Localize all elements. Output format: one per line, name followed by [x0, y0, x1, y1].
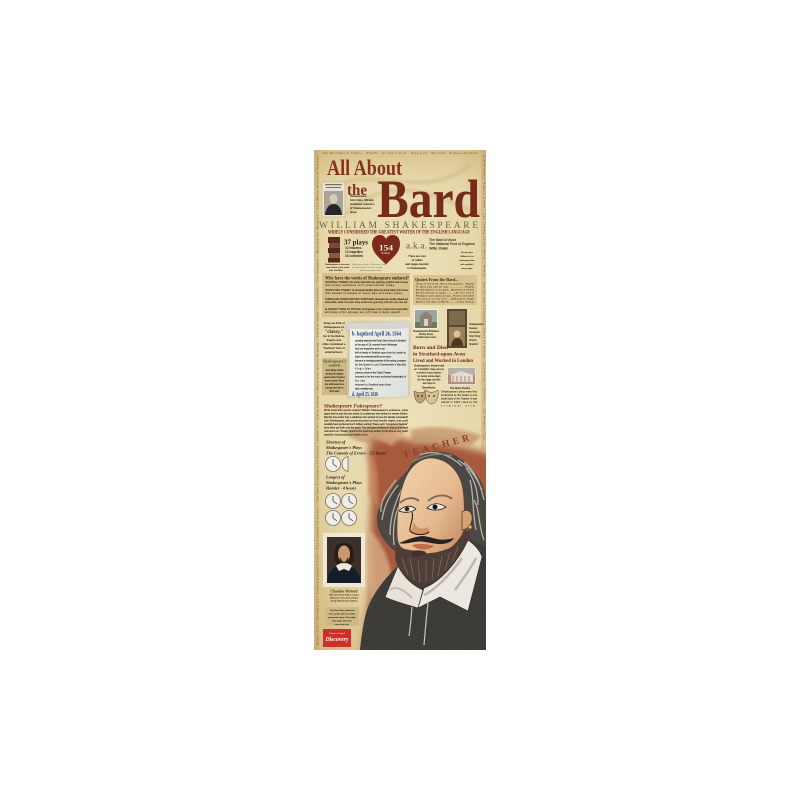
- quotes list: All that glisters is not gold....Merchant of Venice: [416, 288, 475, 292]
- birth date: b. baptized April 26, 1564: [352, 332, 401, 338]
- first folio image with caption: plays.: [350, 210, 358, 214]
- icon: heart with sonnet count: [372, 235, 400, 264]
- note: signature: contemporaries,: [459, 259, 475, 262]
- block body: referred to as "Shake" found in the surviving stories of the time is very much: [324, 430, 409, 433]
- green note: and the passing of time.: [360, 269, 382, 272]
- portrait face: [396, 458, 464, 554]
- text: longest play: Hamlet - 4 hours: [325, 486, 357, 490]
- caption: Globe Theatre: rebuilt in 1997 close to the: [441, 401, 478, 404]
- photo: portrait and grave: [447, 309, 467, 348]
- background paint splash behind portrait: [345, 424, 495, 660]
- panel: Chandos portrait: [323, 533, 365, 602]
- title: Bard: [377, 169, 480, 229]
- a.k.a. nicknames: a.k.a.: [406, 240, 427, 250]
- quotes list: To be, or not to be, that is the question...Hamlet: [416, 282, 474, 286]
- photo: birthplace cottage: Henley Street,: [419, 333, 434, 336]
- block body: have been put forth over the years. The strongest evidence is that an individual: [324, 426, 408, 430]
- icon: clocks, 2.5 hours: [326, 456, 348, 472]
- panel reasons: believable, while the plots keep audiences guessing until the very last act.: [325, 301, 408, 304]
- note: signature: William to his: [461, 255, 474, 258]
- note box: have been lost.: [335, 623, 350, 626]
- caption: Globe Theatre: performed at the Globe on the: [441, 394, 478, 397]
- block body: While historical records support William Shakespeare's existence, some: [324, 409, 409, 412]
- note: signature: many ways.: [461, 268, 473, 270]
- border text: list of plays: [316, 151, 486, 645]
- text: classy Shakespeare: [322, 321, 346, 354]
- quotes list: Parting is such sweet sorrow....Romeo and Juliet: [416, 294, 474, 298]
- sonnets text: during the plague: [326, 372, 344, 376]
- text: longest play: Longest of: [325, 474, 345, 480]
- sonnets text: are addressed to a: [325, 383, 345, 386]
- photo: birthplace cottage: [413, 309, 440, 339]
- quotes list: [416, 282, 475, 304]
- photo: birthplace cottage: Shakespeare's Birthplace: [413, 330, 440, 333]
- logo: Discovery: [325, 636, 349, 643]
- heading: born and died: [413, 345, 473, 364]
- portrait caption: Chandos Portrait: [330, 590, 358, 594]
- icon: comedy and tragedy masks: [414, 390, 438, 404]
- portrait hair: [377, 451, 488, 552]
- note: signature: He was also: [461, 252, 474, 254]
- green note: Shakespeare wrote 154 sonnets, each: [352, 264, 387, 266]
- caption: portrait: Shakespeare's: [469, 323, 485, 326]
- caption: Globe Theatre: original site.: [441, 404, 477, 408]
- portrait beard: [395, 528, 470, 584]
- life events: for the Queen's Lord Chamberlain's Men/the: [355, 364, 407, 366]
- sonnets text: "dark lady.": [329, 390, 340, 393]
- icon: heart with sonnet count: 154: [379, 242, 394, 252]
- text: London theatre career: Stratford.: [422, 386, 436, 390]
- note: words added to the language: 12 million: [411, 258, 423, 262]
- caption: portrait: Stratford: [469, 343, 479, 346]
- block body: Like Shakespeare, who poorly educated and had humble origins, how could: [324, 420, 409, 422]
- caption: portrait: Church,: [469, 339, 477, 342]
- text: classy Shakespeare: Today we think of: [323, 321, 345, 325]
- panel reasons: that speaks to people of every age and every place.: [325, 292, 403, 295]
- note: signature: who spelled it: [460, 263, 474, 266]
- note box: preserved many of the plays: [328, 616, 357, 619]
- panel reasons: UNIVERSAL THEMES: the stories deal with love, jealousy, ambition and revenge: [325, 281, 409, 284]
- note: words added to the language: There are over: [408, 254, 426, 258]
- caption: Globe Theatre: [441, 387, 478, 408]
- title: All About: [327, 155, 403, 180]
- green note: of fourteen lines, on love, beauty: [352, 266, 383, 269]
- life events: his day: [355, 380, 366, 382]
- life events: owned a share of the Globe Theatre: [355, 372, 392, 374]
- text: classy Shakespeare: entertainment.: [325, 350, 343, 354]
- sonnets text: were closed. Many: [325, 380, 345, 382]
- caption under books: after the Bible.: [329, 269, 343, 272]
- block body: possibly have produced such brilliant writing? Many such "conspiracy theories": [324, 423, 408, 426]
- portrait ear and earring: [462, 510, 472, 530]
- text: classy Shakespeare: "lowbrow" form of: [323, 346, 345, 350]
- a.k.a. nicknames: The Bard of Avon: [429, 238, 456, 242]
- heading: born and died: in Stratford-upon-Avon: [413, 352, 465, 358]
- first folio image with caption: published collection: [350, 202, 375, 206]
- quotes list: To thine own self be true..................Hamlet: [416, 286, 474, 288]
- sonnets text: young man and a: [326, 388, 344, 390]
- text: London theatre career: he wrote some plays: [418, 375, 441, 378]
- text: shortest play: Shakespeare's Plays: [326, 445, 362, 450]
- first folio image with caption: [322, 182, 375, 217]
- plays count: 10 histories: [345, 246, 362, 250]
- stamped word: TEACHER: [402, 434, 471, 461]
- panel: life timeline note: [346, 322, 410, 398]
- text: classy Shakespeare: often considered a: [322, 342, 346, 346]
- text: classy Shakespeare: "classy,": [324, 330, 344, 335]
- text: London theatre career: Shakespeare's theatre held: [414, 364, 445, 368]
- a.k.a. nicknames: The National Poet of England: [429, 242, 475, 246]
- quotes list: Beware the Ides of March.........Julius Caesar: [416, 300, 474, 304]
- panel: why study Shakespeare: [322, 273, 410, 317]
- sonnets text: years when theatres: [324, 376, 346, 379]
- heading: born and died: Born and Died: [413, 345, 448, 351]
- panel heading: Why have the works of Shakespeare endured?: [325, 276, 409, 282]
- caption: Globe Theatre: The Globe Theatre: [450, 387, 471, 390]
- caption: Globe Theatre: south bank of the Thames. It was: [441, 398, 478, 400]
- first folio image with caption: First Folio, officially: [350, 198, 374, 202]
- sonnets text: were likely written: [325, 369, 344, 372]
- life events: became a managing partner of the acting company: [355, 360, 407, 362]
- plays count: 12 tragedies: [345, 250, 363, 254]
- block body: capable of producing such works of art.: [324, 434, 368, 436]
- portrait collar: [385, 540, 482, 611]
- text: classy Shakespeare: Shakespeare as: [324, 325, 345, 329]
- quotes heading: Quotes From the Bard...: [415, 277, 458, 282]
- panel: Shakespeare's sonnets: [322, 358, 347, 395]
- sonnets heading: sonnets: [328, 364, 341, 368]
- block body: Was his true author truly a nobleman who wished to have his identity concealed?: [324, 416, 409, 419]
- text: classy Shakespeare: theatre was: [327, 338, 342, 342]
- panel: quotes from the Bard: [413, 275, 477, 305]
- portrait body: [360, 530, 486, 650]
- border text: list of plays: Henry VIII · Richard III · Love's Labour's Lost · The Comedy of Errors · The Two Gentlemen of Verona · Henry V · Julius Caesar · Much Ado About Nothing · Twelfth Night · Cymbeline · The Tempest · Measure for Measure · The Merry Wives of Windsor: [316, 154, 320, 645]
- border text: list of plays: The Merchant of Venice · Othello · As You Like It · King Lear · Macbeth · Romeo and Juliet: [322, 151, 478, 155]
- portrait credit: during Shakespeare's lifetime: [330, 600, 358, 602]
- text block: Shakespeare or Fakespeare: [324, 404, 409, 436]
- a.k.a. nicknames: [406, 238, 475, 250]
- portrait credit: Believed to have been painted: [330, 596, 359, 600]
- text: longest play: Shakespeare's Plays: [326, 480, 362, 485]
- block heading: Shakespeare Fakespeare?: [324, 404, 382, 410]
- caption: portrait: funerary: [469, 327, 478, 330]
- life events: left his family in Stratford upon Avon for London to: [355, 352, 407, 354]
- portrait soul patch: [412, 550, 426, 557]
- note: words added to the language: to Shakespeare.: [407, 266, 427, 270]
- portrait eyes and brows: [399, 495, 452, 512]
- life events: honored to be the most acclaimed playwright of: [355, 376, 406, 378]
- caption under books: Shakespeare is the most-: [325, 263, 350, 266]
- life events: returned to Stratford upon Avon: [355, 384, 392, 386]
- icon: heart with sonnet count: Sonnets: [381, 252, 390, 255]
- note box: seven years after his death,: [329, 612, 356, 616]
- portrait nose: [410, 512, 430, 535]
- plays count: [344, 238, 368, 258]
- life events: begin his professional life as an actor: [355, 356, 391, 358]
- caption: portrait: Holy Trinity: [469, 335, 481, 338]
- life events: had two daughters and a son: [355, 348, 386, 350]
- portrait collar strings: [409, 603, 428, 645]
- life events: died a wealthy man: [355, 388, 374, 390]
- text: London theatre career: an "unworthy" view, and as: [414, 368, 445, 371]
- icon: clocks, 4 hours: [326, 494, 356, 526]
- life events: King's Men: [355, 368, 372, 370]
- photo: Globe Theatre: [447, 367, 476, 385]
- plays count: 16 comedies: [345, 254, 363, 258]
- logo: [323, 629, 351, 647]
- panel reasons: that every audience still understands today.: [325, 284, 395, 287]
- first folio image with caption: Shakespeare: [350, 194, 367, 198]
- panel reasons: [325, 281, 409, 314]
- note box: that might otherwise: [332, 620, 353, 622]
- panel reasons: ELOQUENT TURNS OF PHRASE: his language is rich, musical and memorable,: [325, 308, 408, 311]
- quotes list: All the world's a stage..........As You Like It: [416, 292, 474, 294]
- sonnets heading: Shakespeare's: [323, 360, 346, 364]
- note box: The First Folio, published: [330, 609, 355, 612]
- text: classy Shakespeare: but in his lifetime,: [323, 334, 345, 338]
- title: [327, 155, 480, 229]
- portrait moustache: [399, 536, 454, 544]
- life events: probably attended the King's New School in Stratford: [355, 340, 407, 342]
- life events: at the age of 18, married Anne Hathaway: [355, 344, 398, 346]
- death date: d. April 23, 1616: [352, 392, 378, 398]
- block body: [324, 409, 409, 436]
- panel reasons: and many of his phrases are still used in daily speech.: [325, 311, 401, 314]
- painting sitter: [327, 543, 361, 583]
- life events: [355, 340, 407, 390]
- text: London theatre career: for the stage and his: [418, 378, 441, 382]
- title: the: [347, 182, 367, 199]
- note: words added to the language: web pages devoted: [405, 262, 429, 266]
- photo: birthplace cottage: Stratford-upon-Avon: [416, 336, 437, 339]
- note box: [325, 607, 359, 626]
- text: London theatre career: a writer's most serious: [417, 372, 442, 374]
- border text: list of plays: A Midsummer Night's Dream · The Taming of the Shrew · Hamlet · Antony and Cleopatra · Timon of Athens · Coriolanus · Pericles · The Winter's Tale: [482, 155, 486, 441]
- text: shortest play: Shortest of: [326, 440, 346, 444]
- poster background: [314, 150, 486, 650]
- caption: portrait: monument,: [469, 331, 481, 334]
- logo: Teacher Created: [329, 632, 346, 635]
- block body: argue that he was the pen name of a nobleman who wished to remain hidden.: [324, 412, 408, 416]
- a.k.a. nicknames: Willie Shake: [429, 246, 448, 250]
- caption: Globe Theatre: Shakespeare's plays were first: [441, 390, 477, 394]
- caption under books: read author in the world: [326, 266, 350, 269]
- portrait mouth: [412, 544, 434, 550]
- illustration: portrait of Shakespeare: [360, 451, 488, 650]
- quotes list: The course of true love.....Midsummer Night: [416, 298, 474, 300]
- heading: born and died: Lived and Worked in London: [413, 358, 473, 364]
- icon: stack of books: [328, 237, 340, 262]
- first folio image with caption: of Shakespeare's: [350, 206, 372, 210]
- panel reasons: TRADITIONAL THEMES: he borrowed familiar plots and turned them into drama: [325, 289, 409, 292]
- portrait credit: National Portrait Gallery, London: [329, 594, 360, 596]
- text: shortest play: The Comedy of Errors - 2.5 hours: [326, 450, 386, 456]
- subtitle: WIDELY CONSIDERED THE GREATEST WRITER OF THE ENGLISH LANGUAGE: [328, 230, 470, 236]
- plays count: 37 plays: [344, 238, 368, 246]
- portrait beard strokes: [402, 546, 458, 583]
- panel reasons: COMPELLING CHARACTERS AND STORYLINES: characters are complex, flawed and: [325, 298, 409, 301]
- name heading: WILLIAM SHAKESPEARE: [319, 221, 478, 231]
- text: London theatre career: last days in: [423, 382, 436, 385]
